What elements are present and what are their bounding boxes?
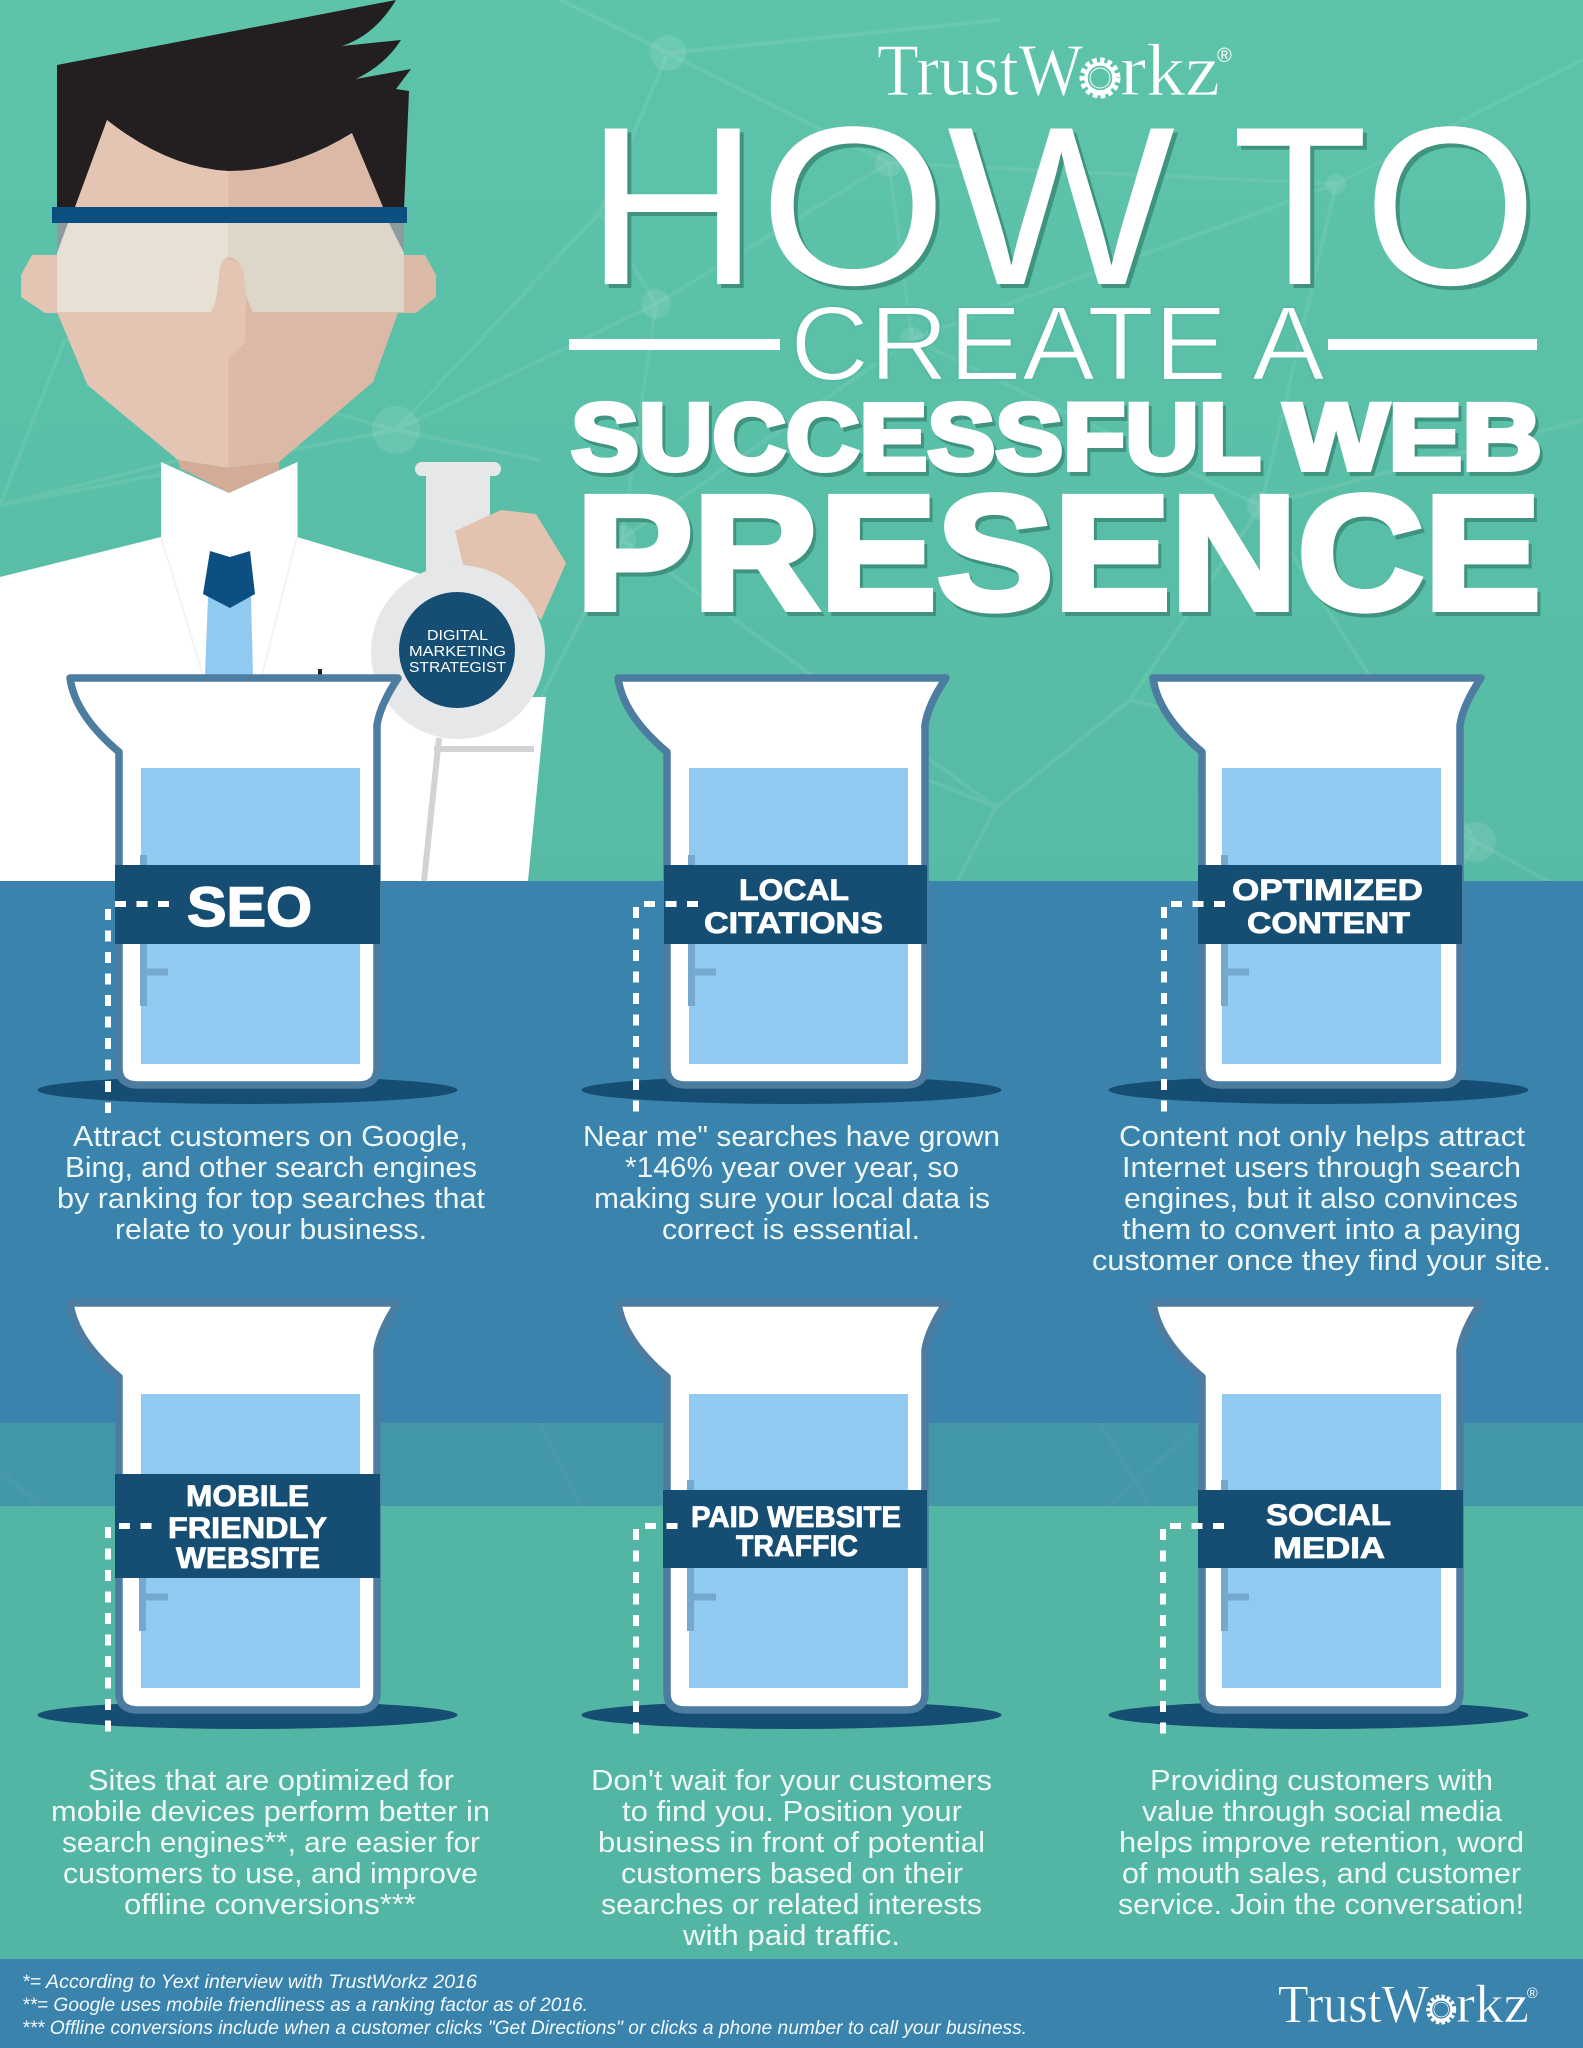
background: translucent transition band: [0, 1423, 1583, 1506]
tie: [205, 597, 253, 675]
label: Mobile Friendly Website: MOBILE: [186, 1480, 309, 1513]
logo: TrustWorkz footer: rkz: [1456, 1974, 1529, 2034]
title: [569, 79, 1542, 644]
tie knot: [203, 551, 255, 608]
label: Optimized Content: OPTIMIZED: [1232, 874, 1423, 907]
beaker: [1108, 1303, 1528, 1729]
flask bulb: [371, 565, 545, 739]
panel: SEO: [38, 678, 485, 1246]
dashed connector: [108, 1526, 152, 1733]
flask label: STRATEGIST: [409, 659, 506, 676]
label: Social Media: [1198, 1490, 1463, 1568]
beaker: [582, 678, 1002, 1104]
dashed connector: [636, 1526, 678, 1735]
logo: TrustWorkz header: TrustW: [877, 30, 1083, 112]
description: Providing customers with: [1150, 1765, 1493, 1797]
title line: SUCCESSFUL WEB: [571, 384, 1542, 490]
pen tip: [318, 669, 322, 679]
shirt collar: [161, 462, 298, 537]
description: mobile devices perform better in: [51, 1796, 490, 1828]
description: [1118, 1765, 1524, 1921]
description: to find you. Position your: [622, 1796, 962, 1828]
panel: Optimized Content: [1092, 678, 1551, 1277]
title line: SUCCESSFUL WEB: WEB: [1284, 384, 1542, 490]
background: green field: [0, 0, 1583, 1510]
background: network pattern: [0, 0, 1583, 1506]
flask label: [399, 592, 515, 708]
coat stem lines: [424, 738, 534, 881]
description: offline conversions***: [124, 1889, 416, 1921]
right ear: [398, 255, 436, 313]
label: Mobile Friendly Website: FRIENDLY: [168, 1512, 327, 1545]
title line: CREATE A: CREATE A: [790, 285, 1325, 403]
panel: Mobile Friendly Website: [38, 1303, 490, 1921]
title line: PRESENCE: PRESENCE: [576, 461, 1541, 644]
footnotes: *** Offline conversions include when a customer clicks "Get Directions" or clicks a phone number to call your business.: [22, 2018, 1027, 2039]
footer logo gear: [1428, 1996, 1454, 2023]
logo: TrustWorkz footer: o: [1430, 1983, 1452, 2032]
goggle lens left: [57, 223, 228, 312]
footer band: [0, 1959, 1583, 2048]
panel: Local Citations: [582, 678, 1002, 1246]
nose highlight: [228, 260, 246, 358]
face right half: [228, 133, 398, 468]
lab coat body: [0, 537, 546, 881]
logo: TrustWorkz header: rkz: [1120, 30, 1220, 112]
description: with paid traffic.: [682, 1920, 900, 1952]
label: Local Citations: LOCAL: [739, 874, 849, 907]
label: Paid Website Traffic: [663, 1490, 927, 1568]
face left half: [57, 120, 228, 468]
description: *146% year over year, so: [625, 1152, 959, 1184]
logo: TrustWorkz footer: ®: [1527, 1986, 1538, 2002]
description: them to convert into a paying: [1122, 1214, 1521, 1246]
coat lapels: [161, 537, 297, 675]
panel: Social Media: [1108, 1303, 1528, 1921]
label: Mobile Friendly Website: WEBSITE: [176, 1542, 320, 1575]
description: business in front of potential: [598, 1827, 985, 1859]
description: making sure your local data is: [594, 1183, 990, 1215]
dashed connector: [636, 904, 698, 1114]
description: of mouth sales, and customer: [1122, 1858, 1521, 1890]
background: blue band: [0, 881, 1583, 1423]
label: Paid Website Traffic: PAID WEBSITE: [691, 1501, 901, 1534]
footnotes: [22, 1972, 1027, 2039]
description: Sites that are optimized for: [88, 1765, 454, 1797]
footnotes: **= Google uses mobile friendliness as a ranking factor as of 2016.: [22, 1995, 588, 2016]
flask label: DIGITAL: [427, 627, 488, 644]
description: searches or related interests: [601, 1889, 982, 1921]
beaker: [38, 678, 458, 1104]
flask label: MARKETING: [409, 643, 506, 660]
hand: [455, 510, 566, 620]
footnotes: *= According to Yext interview with TrustWorkz 2016: [22, 1972, 477, 1993]
goggle corner shading: [57, 223, 404, 253]
title line: SUCCESSFUL WEB: SUCCESSFUL: [571, 384, 1261, 490]
label: Mobile Friendly Website: [115, 1474, 380, 1578]
label: Social Media: MEDIA: [1273, 1532, 1385, 1565]
label: Optimized Content: CONTENT: [1247, 907, 1410, 940]
illustration: digital marketing strategist scientist: [0, 0, 566, 881]
label: Local Citations: [664, 865, 927, 944]
description: relate to your business.: [115, 1214, 427, 1246]
description: Near me" searches have grown: [583, 1121, 1000, 1153]
left ear: [21, 255, 57, 313]
panel: Paid Website Traffic: [582, 1303, 1002, 1952]
logo gear: [1082, 60, 1118, 96]
beaker: [38, 1303, 458, 1729]
description: value through social media: [1142, 1796, 1503, 1828]
description: [57, 1121, 485, 1246]
hair: [57, 0, 411, 210]
neck shadow: [178, 460, 279, 493]
goggle strap: [52, 207, 407, 223]
description: helps improve retention, word: [1119, 1827, 1524, 1859]
description: Attract customers on Google,: [73, 1121, 468, 1153]
logo: TrustWorkz footer: TrustW: [1278, 1974, 1430, 2034]
logo: TrustWorkz footer: [1278, 1974, 1538, 2034]
title line: HOW TO: HOW: [585, 79, 1175, 332]
title line: HOW TO: TO: [1232, 79, 1537, 332]
label: Social Media: SOCIAL: [1266, 1499, 1391, 1532]
description: [591, 1765, 992, 1952]
description: service. Join the conversation!: [1118, 1889, 1524, 1921]
description: search engines**, are easier for: [62, 1827, 480, 1859]
label: Optimized Content: [1198, 865, 1462, 944]
description: engines, but it also convinces: [1124, 1183, 1518, 1215]
logo: TrustWorkz header: o: [1085, 42, 1115, 108]
description: customers to use, and improve: [63, 1858, 478, 1890]
label: Local Citations: CITATIONS: [704, 907, 883, 940]
goggle lens right: [228, 223, 404, 312]
description: customers based on their: [621, 1858, 963, 1890]
description: by ranking for top searches that: [57, 1183, 485, 1215]
logo: TrustWorkz header: ®: [1217, 45, 1232, 67]
beaker: [1108, 678, 1528, 1104]
description: customer once they find your site.: [1092, 1245, 1551, 1277]
dashed connector: [1164, 904, 1226, 1114]
label: Paid Website Traffic: TRAFFIC: [736, 1530, 858, 1563]
title line: HOW TO: [585, 79, 1537, 332]
background: lower green section: [0, 1506, 1583, 1959]
description: Content not only helps attract: [1119, 1121, 1525, 1153]
description: Don't wait for your customers: [591, 1765, 992, 1797]
description: [51, 1765, 490, 1921]
description: Bing, and other search engines: [65, 1152, 477, 1184]
logo: TrustWorkz header: [877, 30, 1232, 112]
dashed connector: [108, 904, 169, 1113]
description: [1092, 1121, 1551, 1277]
label: SEO: SEO: [187, 875, 312, 938]
title line: CREATE A: [569, 285, 1537, 403]
description: Internet users through search: [1122, 1152, 1521, 1184]
dashed connector: [1163, 1526, 1225, 1735]
flask neck: [415, 462, 501, 580]
description: correct is essential.: [662, 1214, 920, 1246]
beaker: [582, 1303, 1002, 1729]
label: SEO: [115, 865, 380, 944]
description: [583, 1121, 1000, 1246]
